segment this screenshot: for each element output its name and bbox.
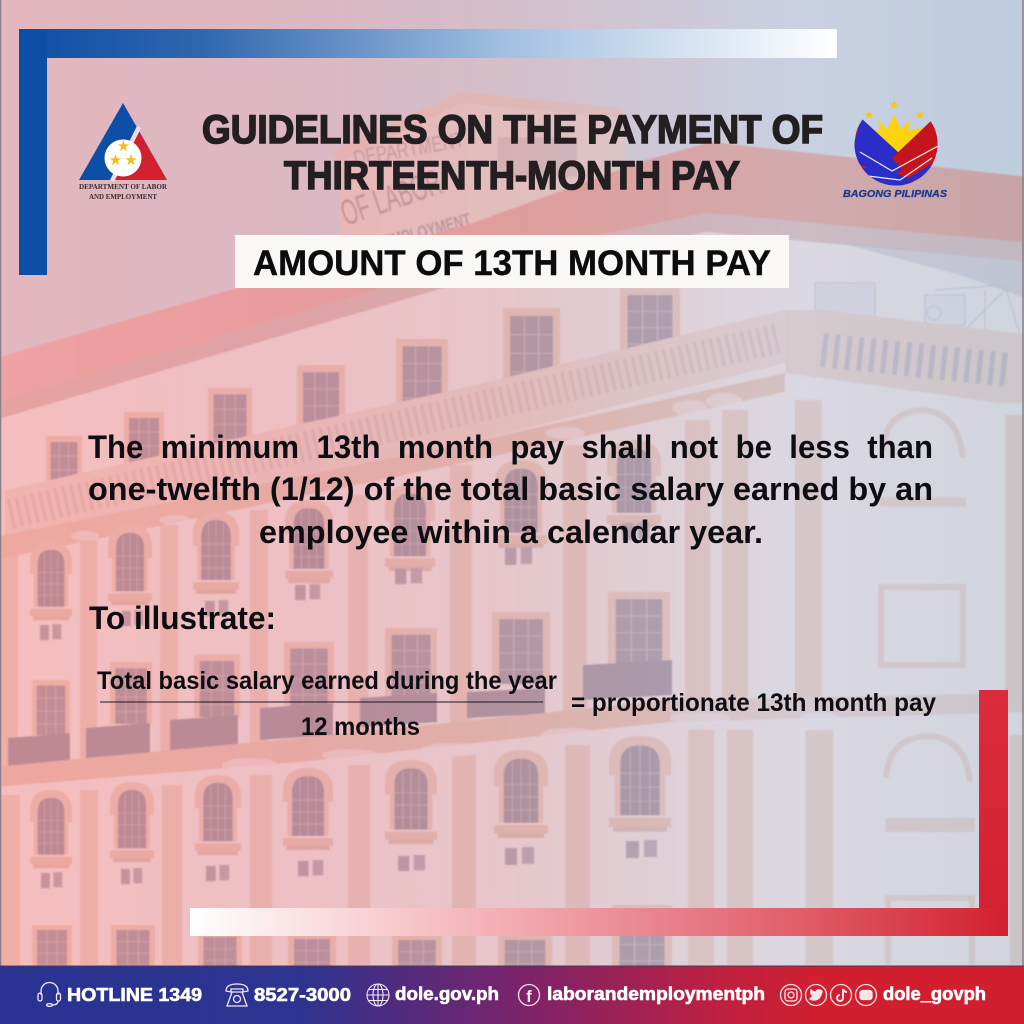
title: THIRTEENTH-MONTH PAY (284, 154, 740, 198)
icon: facebook (518, 984, 540, 1006)
roof eave (0, 213, 1024, 420)
middle floor rectangular windows (32, 592, 670, 735)
logo: Department of Labor and Employment: ★ (109, 152, 122, 169)
lower floor columns (0, 730, 1024, 965)
formula: = proportionate 13th month pay (571, 689, 936, 717)
icon: globe (367, 984, 389, 1006)
logo: Bagong Pilipinas: ★ (889, 98, 899, 112)
upper floor columns (0, 400, 1024, 775)
tower: EMPLOYMENT (381, 209, 473, 252)
tower: DEPARTMENT (352, 127, 466, 171)
tiled roof (0, 142, 1024, 402)
facebook handle: laborandemploymentph (547, 984, 765, 1004)
subtitle banner: AMOUNT OF 13TH MONTH PAY (253, 244, 771, 283)
website: dole.gov.ph (395, 984, 499, 1004)
top floor windows (46, 288, 680, 496)
definition paragraph: one-twelfth (1/12) of the total basic salary earned by an (88, 471, 933, 507)
bottom row windows (32, 905, 672, 985)
column capitals (71, 384, 840, 788)
logo: Bagong Pilipinas: BAGONG PILIPINAS (843, 188, 947, 200)
definition paragraph: employee within a calendar year. (259, 514, 763, 550)
title: GUIDELINES ON THE PAYMENT OF (202, 108, 823, 152)
blue top-left frame (19, 29, 837, 275)
hotline: HOTLINE 1349 (67, 985, 202, 1005)
content layer (79, 100, 948, 735)
logo: Department of Labor and Employment: ★ (117, 138, 130, 155)
title (202, 108, 823, 198)
tower (330, 92, 625, 300)
icon: telephone (226, 984, 248, 1006)
logo: Department of Labor and Employment: AND EMPLOYMENT (89, 192, 157, 201)
formula: 12 months (301, 713, 420, 741)
logo: Bagong Pilipinas: ★ (864, 108, 874, 122)
illustrate heading: To illustrate: (89, 600, 276, 636)
icon: facebook: f (526, 987, 532, 1006)
formula: Total basic salary earned during the year (97, 667, 557, 695)
logo: Department of Labor and Employment: DEPARTMENT OF LABOR (79, 182, 168, 191)
balustrade (0, 310, 1024, 560)
logo: Bagong Pilipinas (843, 98, 947, 200)
tower: OF LABOR (335, 161, 447, 234)
icons: instagram, twitter, tiktok, youtube (780, 984, 876, 1006)
formula (97, 667, 936, 741)
building wall (0, 213, 1024, 1024)
middle floor arched windows (29, 440, 662, 640)
logo: Department of Labor and Employment: ★ (124, 152, 138, 169)
right wing mouldings (880, 410, 975, 965)
iron balconies (8, 660, 672, 766)
red bottom-right frame (190, 690, 1008, 936)
cornice band (0, 694, 1024, 787)
icon: headset (38, 982, 60, 1006)
definition paragraph: The minimum 13th month pay shall not be less than (88, 429, 933, 465)
definition paragraph (88, 429, 933, 550)
lower arched windows (29, 736, 672, 888)
telephone number: 8527-3000 (254, 985, 351, 1005)
logo: Department of Labor and Employment (79, 103, 168, 201)
social handle: dole_govph (883, 984, 986, 1004)
logo: Bagong Pilipinas: ★ (915, 108, 925, 122)
subtitle banner (235, 235, 789, 288)
rooftop equipment (815, 283, 1020, 335)
